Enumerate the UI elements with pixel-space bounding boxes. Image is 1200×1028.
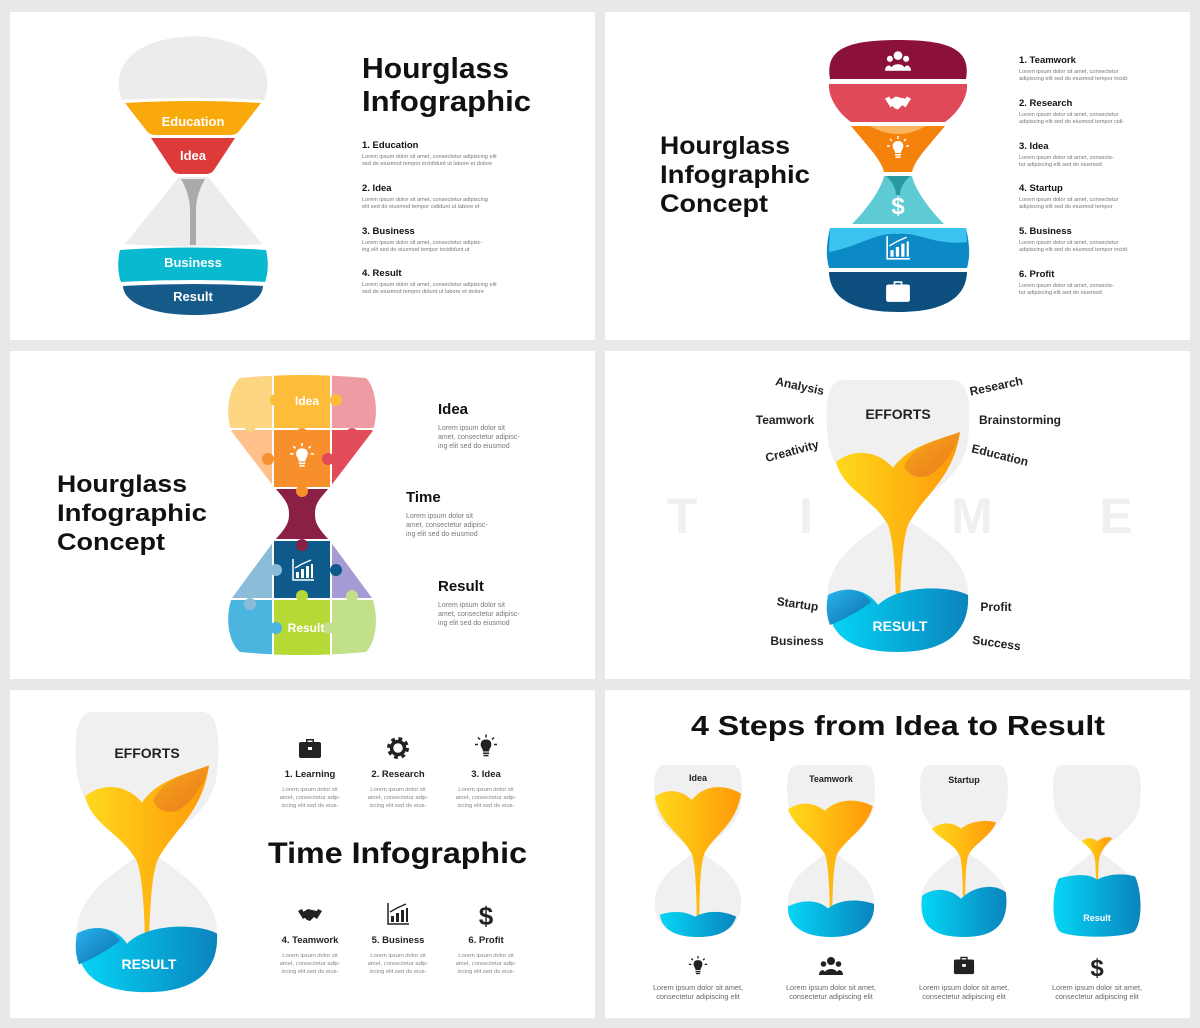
title: Hourglass xyxy=(362,53,509,85)
list: six steps: tur adipiscing elit sed do eiusmod xyxy=(1019,290,1102,296)
text blocks: idea, time, result: amet, consectetur adipisc- xyxy=(406,522,488,529)
six icon items: Lorem ipsum dolor sit xyxy=(282,787,338,793)
icons and captions under steps: Lorem ipsum dolor sit amet, xyxy=(919,983,1009,992)
six icon items: iscing elit sed do eius- xyxy=(369,969,427,975)
hourglass: six bands with icons xyxy=(827,40,969,312)
background word TIME xyxy=(667,488,1133,544)
text blocks: idea, time, result: ing elit sed do eiusmod xyxy=(438,620,510,627)
text blocks: idea, time, result: Lorem ipsum dolor sit xyxy=(438,602,505,609)
icons and captions under steps: consectetur adipiscing elit xyxy=(656,992,740,1001)
six icon items: amet, consectetur adip- xyxy=(280,961,340,967)
six icon items: 3. Idea xyxy=(471,769,501,780)
six icon items: amet, consectetur adip- xyxy=(456,795,516,801)
six icon items: amet, consectetur adip- xyxy=(368,795,428,801)
word labels around hourglass xyxy=(756,374,1061,653)
list: four steps: sed do eiusmod tempor incididunt ut labore et dolore xyxy=(362,161,492,167)
hourglass: four bands: Result xyxy=(173,289,214,304)
hourglass: efforts result: RESULT xyxy=(122,956,177,972)
list: six steps: Lorem ipsum dolor sit amet, consectetur xyxy=(1019,197,1119,203)
six icon items: amet, consectetur adip- xyxy=(456,961,516,967)
hourglass: efforts result xyxy=(76,712,218,992)
text blocks: idea, time, result: Lorem ipsum dolor sit xyxy=(438,425,505,432)
title: Infographic xyxy=(57,500,207,527)
word labels around hourglass: Startup xyxy=(776,594,819,614)
six icon items: iscing elit sed do eius- xyxy=(281,969,339,975)
text blocks: idea, time, result: ing elit sed do eiusmod xyxy=(406,531,478,538)
title: Concept xyxy=(57,529,165,556)
list: four steps: sed do eiusmod tempor didunt ut labore et dolore xyxy=(362,289,484,295)
step 4 hourglass: result xyxy=(1053,765,1141,937)
hourglass: four bands: Idea xyxy=(180,148,207,163)
six icon items: Lorem ipsum dolor sit xyxy=(370,787,426,793)
list: four steps: 3. Business xyxy=(362,226,415,237)
list: four steps: 4. Result xyxy=(362,268,402,279)
six icon items: Lorem ipsum dolor sit xyxy=(458,787,514,793)
panel: puzzle hourglass xyxy=(10,351,595,679)
word labels around hourglass: Education xyxy=(970,441,1030,469)
six icon items: iscing elit sed do eius- xyxy=(457,803,515,809)
six icon items: 4. Teamwork xyxy=(282,935,339,946)
step 4 hourglass: result: Result xyxy=(1083,913,1111,923)
list: six steps: 4. Startup xyxy=(1019,183,1063,194)
six icon items: Lorem ipsum dolor sit xyxy=(370,953,426,959)
puzzle hourglass xyxy=(228,375,376,655)
puzzle hourglass: Idea xyxy=(295,394,319,408)
hourglass: efforts to result: EFFORTS xyxy=(865,406,931,422)
step 2 hourglass: teamwork: Teamwork xyxy=(809,774,854,784)
word labels around hourglass: Business xyxy=(770,634,824,648)
list: six steps: tur adipiscing elit sed do eiusmod xyxy=(1019,162,1102,168)
text blocks: idea, time, result: Time xyxy=(406,489,441,506)
six icon items: iscing elit sed do eius- xyxy=(457,969,515,975)
title xyxy=(57,471,207,556)
icons and captions under steps: consectetur adipiscing elit xyxy=(1055,992,1139,1001)
list: six steps: Lorem ipsum dolor sit amet, consectetur xyxy=(1019,240,1119,246)
word labels around hourglass: Success xyxy=(971,633,1022,653)
panel: hourglass infographic concept 6 steps xyxy=(605,12,1190,340)
title xyxy=(660,132,810,218)
icons and captions under steps: Lorem ipsum dolor sit amet, xyxy=(786,983,876,992)
step 2 hourglass: teamwork xyxy=(787,765,875,937)
panel: efforts to result with word cloud xyxy=(605,351,1190,679)
puzzle hourglass: Result xyxy=(288,621,324,635)
hourglass: four bands xyxy=(118,36,268,315)
panel: hourglass infographic 1 xyxy=(10,12,595,340)
six icon items: amet, consectetur adip- xyxy=(368,961,428,967)
list: six steps: 5. Business xyxy=(1019,226,1072,237)
title xyxy=(362,53,531,118)
title: Hourglass xyxy=(57,471,187,498)
text blocks: idea, time, result: amet, consectetur adipisc- xyxy=(438,611,520,618)
title: Concept xyxy=(660,190,769,218)
title: Hourglass xyxy=(660,132,790,160)
icons and captions under steps xyxy=(653,955,1142,1001)
text blocks: idea, time, result xyxy=(406,401,520,627)
text blocks: idea, time, result: Result xyxy=(438,578,484,595)
text blocks: idea, time, result: Lorem ipsum dolor sit xyxy=(406,513,473,520)
panel: 4 steps from idea to result xyxy=(605,690,1190,1018)
six icon items: 6. Profit xyxy=(468,935,505,946)
panel: time infographic xyxy=(10,690,595,1018)
title: Time Infographic xyxy=(268,837,527,870)
six icon items: 5. Business xyxy=(372,935,424,946)
icons and captions under steps: consectetur adipiscing elit xyxy=(789,992,873,1001)
icons and captions under steps: consectetur adipiscing elit xyxy=(922,992,1006,1001)
text blocks: idea, time, result: ing elit sed do eiusmod xyxy=(438,443,510,450)
list: six steps: adipiscing elit sed do eiusmod tempor incidi- xyxy=(1019,247,1129,253)
list: four steps xyxy=(362,140,497,295)
list: six steps: Lorem ipsum dolor sit amet, consecte- xyxy=(1019,283,1114,289)
text blocks: idea, time, result: Idea xyxy=(438,401,469,418)
icons and captions under steps: Lorem ipsum dolor sit amet, xyxy=(653,983,743,992)
step 3 hourglass: startup: Startup xyxy=(948,775,980,785)
word labels around hourglass: Profit xyxy=(980,600,1012,614)
title: Infographic xyxy=(660,161,810,189)
word labels around hourglass: Research xyxy=(968,374,1024,399)
word labels around hourglass: Analysis xyxy=(774,374,826,398)
background word TIME: I xyxy=(799,488,813,544)
list: six steps xyxy=(1019,55,1129,296)
step 1 hourglass: idea xyxy=(654,765,742,937)
list: four steps: Lorem ipsum dolor sit amet, consectetur adipiscing elit xyxy=(362,282,497,288)
list: four steps: 1. Education xyxy=(362,140,419,151)
list: four steps: Lorem ipsum dolor sit amet, consectetur adipisc- xyxy=(362,240,482,246)
title: 4 Steps from Idea to Result xyxy=(691,710,1105,741)
six icon items: iscing elit sed do eius- xyxy=(281,803,339,809)
six icon items: $ xyxy=(479,901,494,931)
word labels around hourglass: Creativity xyxy=(764,437,820,465)
word labels around hourglass: Brainstorming xyxy=(979,413,1061,427)
hourglass: efforts result: EFFORTS xyxy=(114,745,180,761)
hourglass: four bands: Education xyxy=(162,114,224,129)
six icon items: Lorem ipsum dolor sit xyxy=(458,953,514,959)
list: six steps: 3. Idea xyxy=(1019,141,1049,152)
title: Infographic xyxy=(362,86,531,118)
list: four steps: 2. Idea xyxy=(362,183,392,194)
list: four steps: ing elit sed do eiusmod tempor incididunt ut xyxy=(362,247,470,253)
hourglass: four bands: Business xyxy=(164,255,222,270)
list: six steps: 6. Profit xyxy=(1019,269,1055,280)
hourglass: efforts to result: RESULT xyxy=(873,618,928,634)
list: six steps: 2. Research xyxy=(1019,98,1073,109)
text blocks: idea, time, result: amet, consectetur adipisc- xyxy=(438,434,520,441)
list: six steps: Lorem ipsum dolor sit amet, consecte- xyxy=(1019,155,1114,161)
list: four steps: elit sed do eiusmod tempor cididunt ut labore et xyxy=(362,204,480,210)
icons and captions under steps: $ xyxy=(1090,955,1104,982)
background word TIME: M xyxy=(951,488,993,544)
background word TIME: T xyxy=(667,488,697,544)
icons and captions under steps: Lorem ipsum dolor sit amet, xyxy=(1052,983,1142,992)
list: six steps: adipiscing elit sed do eiusmod tempor incidi- xyxy=(1019,76,1129,82)
list: four steps: Lorem ipsum dolor sit amet, consectetur adipiscing elit xyxy=(362,154,497,160)
list: six steps: Lorem ipsum dolor sit amet, consectetur xyxy=(1019,69,1119,75)
hourglass: six bands with icons: $ xyxy=(891,193,905,220)
six icon items xyxy=(280,734,516,975)
six icon items: 2. Research xyxy=(371,769,425,780)
list: four steps: Lorem ipsum dolor sit amet, consectetur adipiscing xyxy=(362,197,488,203)
step 3 hourglass: startup xyxy=(920,765,1008,937)
six icon items: iscing elit sed do eius- xyxy=(369,803,427,809)
hourglass: efforts to result xyxy=(827,380,969,652)
list: six steps: adipiscing elit sed do eiusmod tempor cidi- xyxy=(1019,119,1125,125)
list: six steps: 1. Teamwork xyxy=(1019,55,1077,66)
list: six steps: Lorem ipsum dolor sit amet, consectetur xyxy=(1019,112,1119,118)
list: six steps: adipiscing elit sed do eiusmod tempor xyxy=(1019,204,1113,210)
six icon items: 1. Learning xyxy=(285,769,336,780)
step 1 hourglass: idea: Idea xyxy=(689,773,708,783)
six icon items: amet, consectetur adip- xyxy=(280,795,340,801)
six icon items: Lorem ipsum dolor sit xyxy=(282,953,338,959)
word labels around hourglass: Teamwork xyxy=(756,413,815,427)
background word TIME: E xyxy=(1099,488,1133,544)
